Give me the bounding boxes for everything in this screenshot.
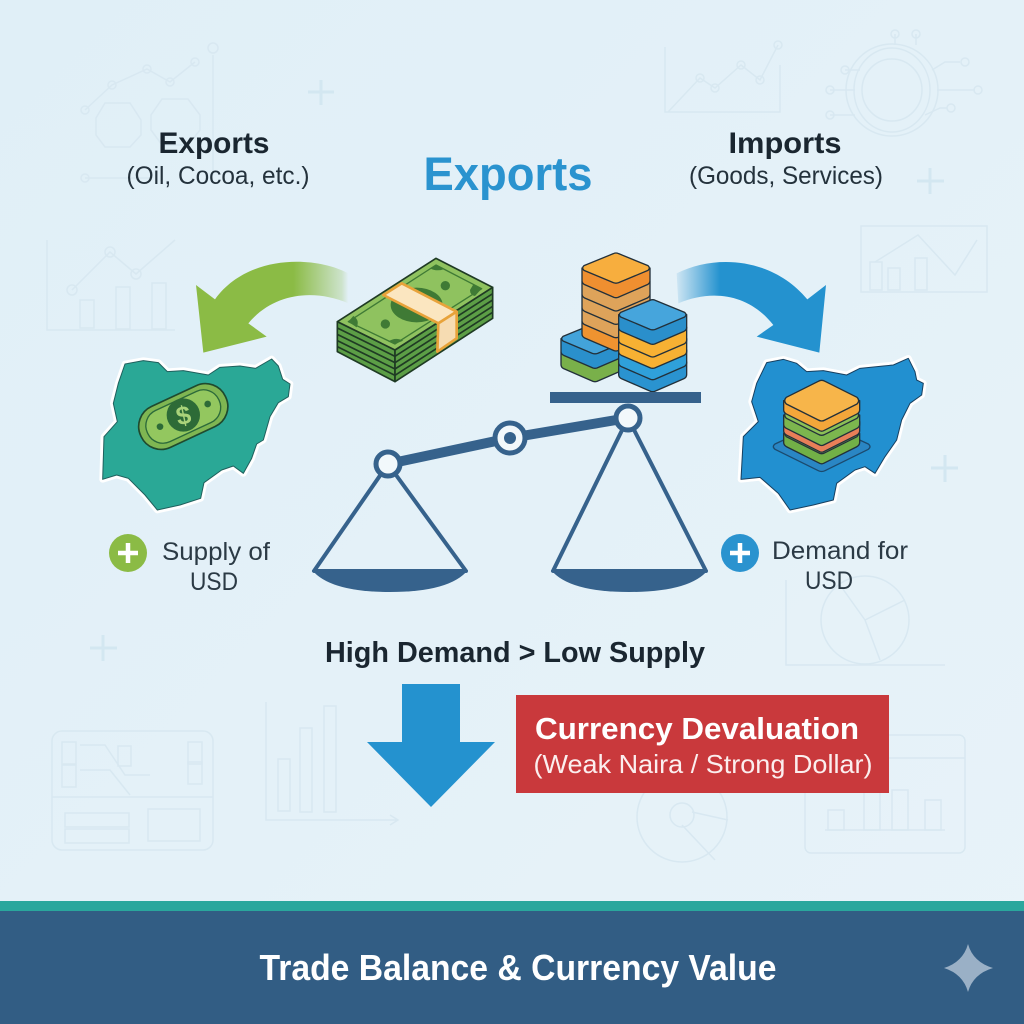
right pan — [551, 418, 708, 592]
arrow: green curved — [196, 262, 348, 353]
faint background icons — [47, 30, 987, 862]
callout: currency devaluation — [516, 695, 889, 793]
left pan — [312, 464, 468, 592]
icon: goods stacks — [561, 253, 687, 392]
icon: dollar note: $ — [173, 399, 194, 431]
statement: high demand low supply: High Demand > Low Supply — [325, 637, 705, 669]
icon: money stack — [337, 258, 493, 382]
label: demand for USD — [721, 534, 908, 595]
map: nigeria exports — [103, 359, 290, 510]
arrow: blue curved — [677, 262, 826, 353]
label: demand for USD: USD — [805, 567, 853, 595]
icon: dollar note — [131, 376, 235, 457]
heading: exports left: Exports — [158, 127, 270, 160]
label: supply of USD: Supply of — [162, 538, 270, 566]
label: demand for USD: Demand for — [772, 537, 908, 565]
callout: currency devaluation: (Weak Naira / Strong Dollar) — [534, 749, 872, 779]
heading: exports left: (Oil, Cocoa, etc.) — [126, 162, 310, 190]
heading: imports right — [689, 127, 883, 190]
icon: four-point star — [944, 944, 993, 992]
platform — [550, 392, 701, 403]
label: supply of USD — [109, 534, 270, 596]
heading: imports right: Imports — [728, 127, 842, 160]
callout: currency devaluation: Currency Devaluation — [535, 711, 859, 746]
title: exports centre: Exports — [424, 147, 592, 200]
footer title: Trade Balance & Currency Value — [260, 947, 776, 988]
decorative plus signs — [90, 80, 958, 661]
heading: imports right: (Goods, Services) — [689, 162, 883, 190]
map: nigeria imports — [741, 358, 923, 510]
balance scale — [312, 392, 708, 592]
icon: goods on map — [773, 380, 870, 471]
footer band — [0, 901, 1024, 1024]
arrow: down — [367, 684, 495, 807]
beam — [388, 418, 628, 464]
heading: exports left — [126, 127, 310, 190]
label: supply of USD: USD — [190, 568, 238, 596]
